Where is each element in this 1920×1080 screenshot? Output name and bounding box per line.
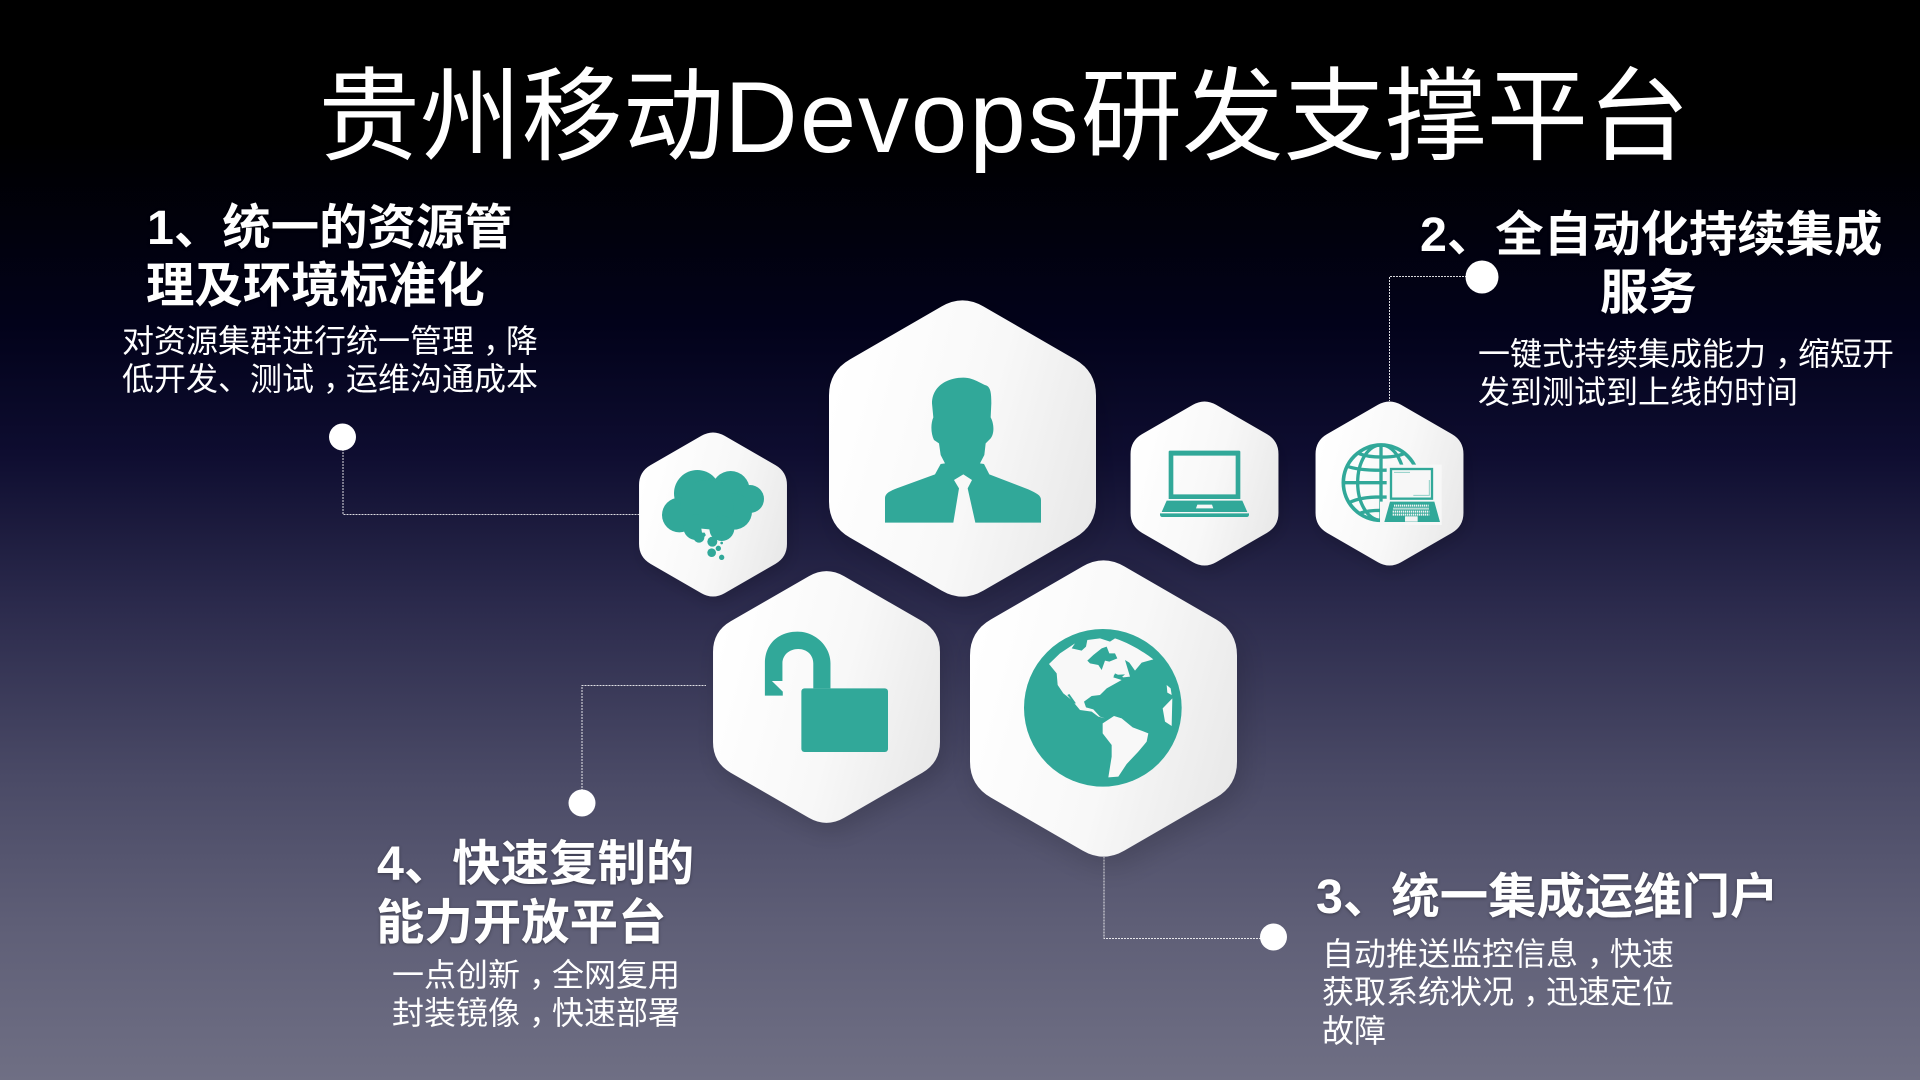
text block: item 1: [122, 201, 538, 397]
hexagon: globe laptop: [1316, 401, 1463, 566]
icon: laptop: [1160, 451, 1249, 517]
hexagon: earth: [970, 560, 1237, 857]
dot: item 4: [568, 790, 596, 816]
connector: item 1: [343, 437, 639, 514]
body: item 1 line 1: 对资源集群进行统一管理 降: [122, 323, 538, 359]
dot: item 3: [1260, 924, 1287, 950]
body: item 2 line 1: 一键式持续集成能力 缩短开: [1478, 336, 1894, 372]
body: item 1 line 1: ，: [483, 323, 515, 359]
heading: item 2: 2、全自动化持续集成: [1420, 208, 1882, 262]
icon: cloud: [662, 470, 764, 560]
body: item 4 line 1: ，: [529, 957, 561, 993]
connector: item 3: [1104, 857, 1273, 938]
heading: item 3: 3、统一集成运维门户: [1316, 870, 1778, 924]
heading: item 2 line 2: 服务: [1600, 266, 1697, 320]
body: item 3 line 1: 自动推送监控信息 快速: [1322, 936, 1674, 972]
heading: item 4: 4、快速复制的: [377, 837, 694, 891]
hexagon: person: [829, 300, 1096, 597]
connector: item 2: [1390, 276, 1482, 401]
title: 贵州移动Devops研发支撑平台: [318, 60, 1690, 174]
body: item 3 line 2: 获取系统状况 迅速定位: [1322, 974, 1674, 1010]
body: item 4 line 2: 封装镜像 快速部署: [392, 995, 680, 1031]
heading: item 1: 1、统一的资源管: [147, 201, 513, 255]
text block: item 3: [1316, 870, 1778, 1049]
connector: item 4: [582, 686, 706, 803]
heading: item 4 line 2: 能力开放平台: [376, 896, 666, 950]
body: item 4 line 2: ，: [529, 995, 561, 1031]
body: item 3 line 2: ，: [1523, 974, 1555, 1010]
body: item 2 line 2: 发到测试到上线的时间: [1478, 374, 1798, 410]
dot: item 2: [1466, 260, 1498, 294]
icon: person: [885, 378, 1041, 523]
text block: item 4: [376, 837, 694, 1031]
body: item 4 line 1: 一点创新 全网复用: [392, 957, 680, 993]
hexagon: laptop: [1131, 401, 1278, 566]
body: item 1 line 2: 低开发、测试 运维沟通成本: [122, 361, 538, 397]
hexagon: lock: [713, 571, 940, 823]
dot: item 1: [329, 424, 356, 450]
icon: earth: [1024, 629, 1182, 787]
icon: open lock: [765, 632, 888, 752]
heading: item 1 line 2: 理及环境标准化: [146, 259, 485, 313]
body: item 1 line 2: ，: [323, 361, 355, 397]
body: item 3 line 3: 故障: [1322, 1013, 1386, 1049]
hexagon: cloud: [639, 432, 787, 597]
body: item 2 line 1: ，: [1775, 336, 1807, 372]
icon: globe with laptop: [1343, 445, 1442, 525]
text block: item 2: [1420, 208, 1894, 410]
body: item 3 line 1: ，: [1587, 936, 1619, 972]
